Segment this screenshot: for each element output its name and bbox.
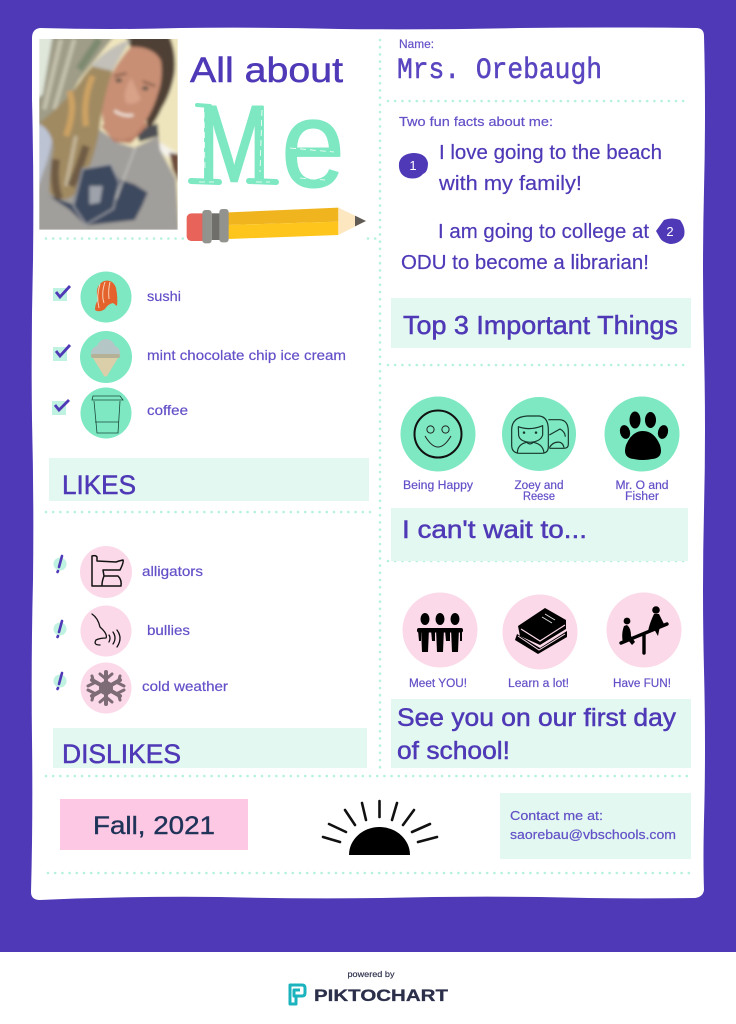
fun facts label: Two fun facts about me: — [399, 114, 553, 129]
item: Zoey and Reese — [502, 397, 576, 503]
dislike: bullies — [54, 606, 190, 656]
teacher name: Mrs. Orebaugh — [397, 54, 602, 88]
like: sushi: sushi — [147, 288, 181, 304]
fact 2 — [401, 218, 684, 274]
heading: LIKES — [49, 458, 369, 501]
Piktochart logo — [290, 985, 449, 1005]
heading: Me — [191, 76, 345, 214]
fact 1 — [399, 141, 662, 195]
fact 1: I love going to the beach — [439, 141, 662, 164]
item: Being Happy: Being Happy — [403, 480, 473, 492]
heading: I can't wait to... — [391, 508, 688, 561]
like: coffee: coffee — [147, 402, 188, 418]
fact 1: with my family! — [438, 172, 582, 195]
heading: Top 3 Important Things — [391, 298, 691, 348]
season label: Fall, 2021 — [93, 812, 215, 840]
closing message: of school! — [397, 737, 510, 765]
fact 2: 2 — [666, 224, 674, 239]
fact 1: 1 — [409, 158, 417, 173]
like: mint chocolate chip ice cream — [53, 331, 346, 383]
contact box — [500, 793, 691, 859]
name label: Name: — [399, 39, 434, 51]
footer white band — [0, 952, 736, 1024]
item: Mr. O and Fisher — [604, 396, 680, 503]
like: sushi — [53, 272, 181, 322]
item: Being Happy — [400, 396, 476, 492]
item: Have FUN! — [606, 592, 682, 690]
item: Mr. O and Fisher: Mr. O and — [616, 480, 668, 492]
icon: sun — [323, 801, 437, 855]
dislike: cold weather — [54, 662, 228, 714]
dislikes list — [54, 546, 228, 714]
item: Learn a lot!: Learn a lot! — [508, 678, 569, 690]
dislike: bullies: bullies — [147, 622, 190, 638]
item: Zoey and Reese: Reese — [523, 491, 555, 503]
heading: LIKES: LIKES — [62, 470, 136, 500]
season label — [60, 799, 248, 850]
dislike: alligators — [54, 546, 203, 598]
like: coffee — [52, 388, 188, 438]
white card — [31, 28, 705, 900]
contact box: Contact me at: — [510, 808, 603, 823]
heading: DISLIKES: DISLIKES — [62, 739, 181, 769]
item: Have FUN!: Have FUN! — [613, 678, 671, 690]
item: Meet YOU!: Meet YOU! — [409, 678, 467, 690]
heading: Me: e — [281, 76, 345, 214]
heading: I can't wait to...: I can't wait to... — [402, 516, 587, 544]
closing message: See you on our first day — [397, 704, 677, 732]
heading: Top 3 Important Things: Top 3 Important Things — [403, 310, 678, 340]
item: Zoey and Reese: Zoey and — [514, 480, 564, 492]
heading: DISLIKES — [53, 728, 367, 769]
photo of Mrs. Orebaugh — [36, 36, 183, 233]
fact 2: ODU to become a librarian! — [401, 251, 649, 274]
Piktochart logo: PIKTOCHART — [314, 986, 449, 1005]
fact 2: I am going to college at — [438, 220, 649, 243]
powered by: powered by — [348, 969, 395, 979]
dislike: alligators: alligators — [142, 563, 203, 579]
heading: All about: All about — [190, 51, 343, 90]
heading: Me: M — [198, 83, 270, 204]
contact box: saorebau@vbschools.com — [510, 827, 676, 842]
likes list — [52, 272, 346, 438]
dislike: cold weather: cold weather — [142, 678, 228, 694]
item: Mr. O and Fisher: Fisher — [625, 491, 659, 503]
closing message — [391, 699, 691, 768]
item: Learn a lot! — [502, 594, 578, 690]
icon: pencil — [187, 208, 366, 243]
like: mint chocolate chip ice cream: mint chocolate chip ice cream — [147, 347, 346, 363]
item: Meet YOU! — [402, 592, 478, 690]
